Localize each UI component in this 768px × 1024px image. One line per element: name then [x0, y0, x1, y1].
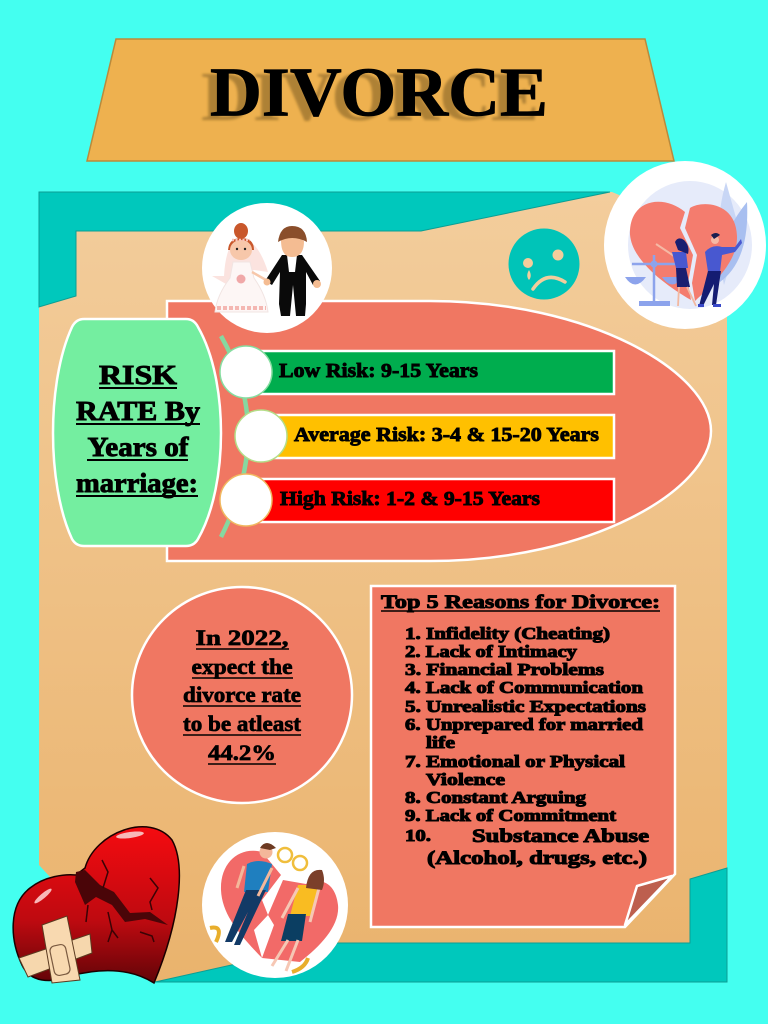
risk panel background — [167, 301, 711, 561]
risk rate heading: RATE By — [76, 396, 201, 426]
risk rate heading: RISK — [99, 360, 177, 390]
reasons list: 10. — [405, 826, 431, 845]
icon: couple split heart — [202, 832, 348, 978]
average risk bar — [235, 410, 614, 462]
low risk bar — [220, 346, 614, 398]
title banner — [87, 39, 674, 161]
icon: bandaged broken heart — [13, 827, 179, 983]
reasons list: 1. Infidelity (Cheating) — [405, 624, 610, 643]
reasons list — [405, 624, 649, 869]
sad face icon — [508, 228, 580, 300]
teal corner top-left — [39, 192, 610, 307]
risk panel connector arc — [221, 336, 248, 537]
teal corner bottom-right — [155, 868, 727, 982]
reasons list: (Alcohol, drugs, etc.) — [427, 848, 647, 869]
title: DIVORCE — [201, 59, 539, 136]
average risk bar: Average Risk: 3-4 & 15-20 Years — [294, 424, 599, 446]
title: DIVORCE — [210, 54, 548, 132]
stat circle: In 2022, — [196, 625, 288, 650]
reasons list: 7. Emotional or Physical — [405, 752, 626, 771]
reasons list: 9. Lack of Commitment — [405, 806, 617, 825]
paper background — [39, 192, 727, 982]
stat circle: 44.2% — [208, 740, 276, 765]
reasons list: 5. Unrealistic Expectations — [405, 697, 647, 716]
reasons list: life — [426, 733, 455, 752]
reasons list: 6. Unprepared for married — [405, 715, 643, 734]
icon: broken heart couple with scales — [604, 161, 766, 329]
reasons list: Substance Abuse — [472, 826, 649, 847]
reasons list: 4. Lack of Communication — [405, 678, 643, 697]
reasons heading: Top 5 Reasons for Divorce: — [381, 593, 660, 613]
reasons list: Violence — [426, 770, 505, 789]
page curl — [625, 876, 672, 925]
low risk bar: Low Risk: 9-15 Years — [279, 360, 478, 382]
stat circle: expect the — [192, 654, 293, 679]
reasons panel — [371, 586, 675, 927]
icon: bride and groom — [202, 203, 332, 333]
stat circle — [132, 587, 352, 803]
stat circle: to be atleast — [183, 711, 302, 736]
reasons list: 3. Financial Problems — [405, 660, 605, 679]
risk rate heading — [53, 319, 221, 546]
high risk bar — [220, 474, 614, 526]
risk rate heading: marriage: — [76, 468, 198, 498]
reasons list: 2. Lack of Intimacy — [405, 642, 578, 661]
high risk bar: High Risk: 1-2 & 9-15 Years — [280, 488, 540, 510]
risk rate heading: Years of — [88, 432, 190, 462]
reasons list: 8. Constant Arguing — [405, 788, 587, 807]
stat circle: divorce rate — [183, 682, 301, 707]
